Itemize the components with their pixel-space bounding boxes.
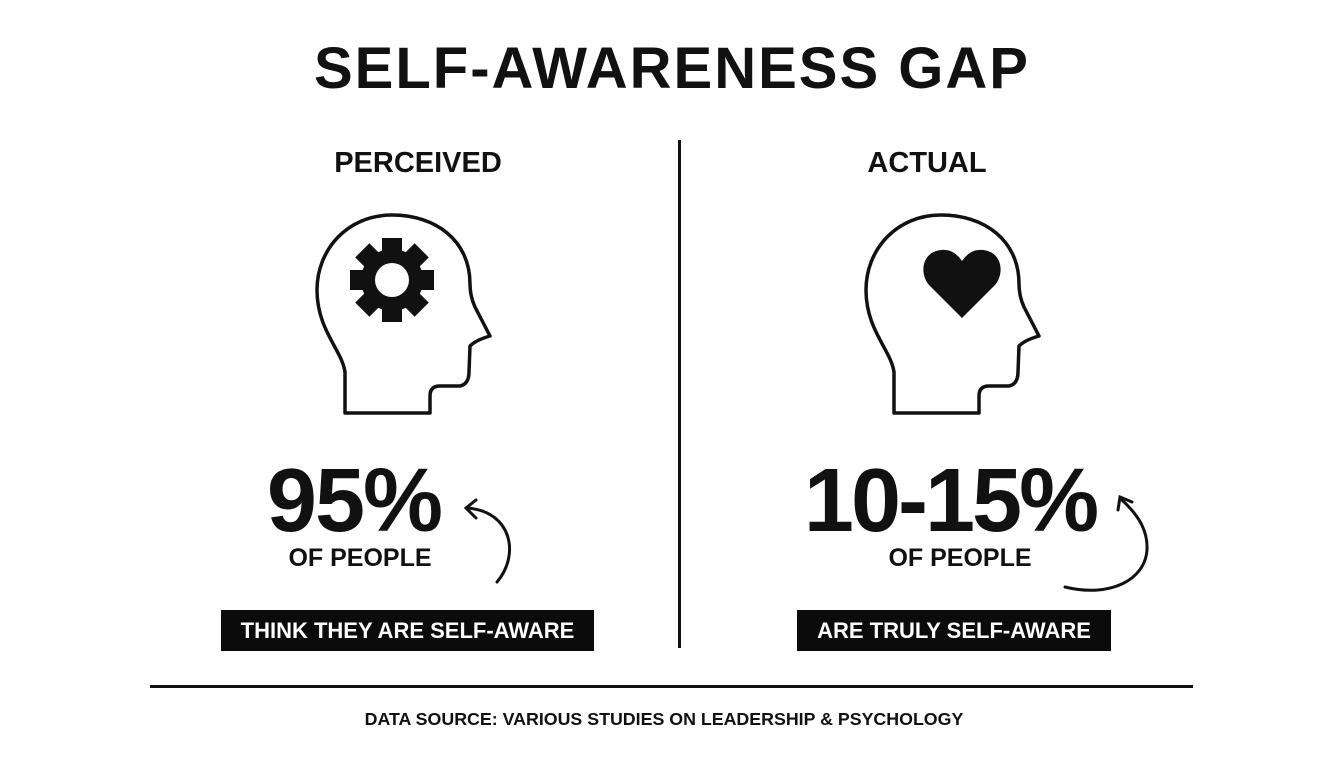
label: are truly self-aware: ARE TRULY SELF-AWARE: [817, 618, 1091, 643]
text: of people left: OF PEOPLE: [288, 544, 432, 572]
label: think they are self-aware: [221, 610, 594, 651]
label: are truly self-aware: [797, 610, 1111, 651]
divider horizontal: [150, 685, 1193, 688]
icon: head with heart: [864, 213, 1041, 415]
stat: 10-15%: 10-15%: [804, 451, 1096, 551]
heading: perceived: PERCEIVED: [334, 147, 502, 179]
heading: actual: ACTUAL: [867, 147, 987, 179]
footer: data source: DATA SOURCE: VARIOUS STUDIES ON LEADERSHIP & PSYCHOLOGY: [365, 709, 963, 729]
divider vertical: [678, 140, 681, 648]
label: think they are self-aware: THINK THEY ARE SELF-AWARE: [241, 618, 574, 643]
stat: 95%: 95%: [267, 451, 441, 551]
arrow: right: [1064, 494, 1149, 592]
arrow: left: [464, 498, 512, 584]
title: SELF-AWARENESS GAP: [314, 36, 1030, 101]
text: of people right: OF PEOPLE: [888, 544, 1032, 572]
